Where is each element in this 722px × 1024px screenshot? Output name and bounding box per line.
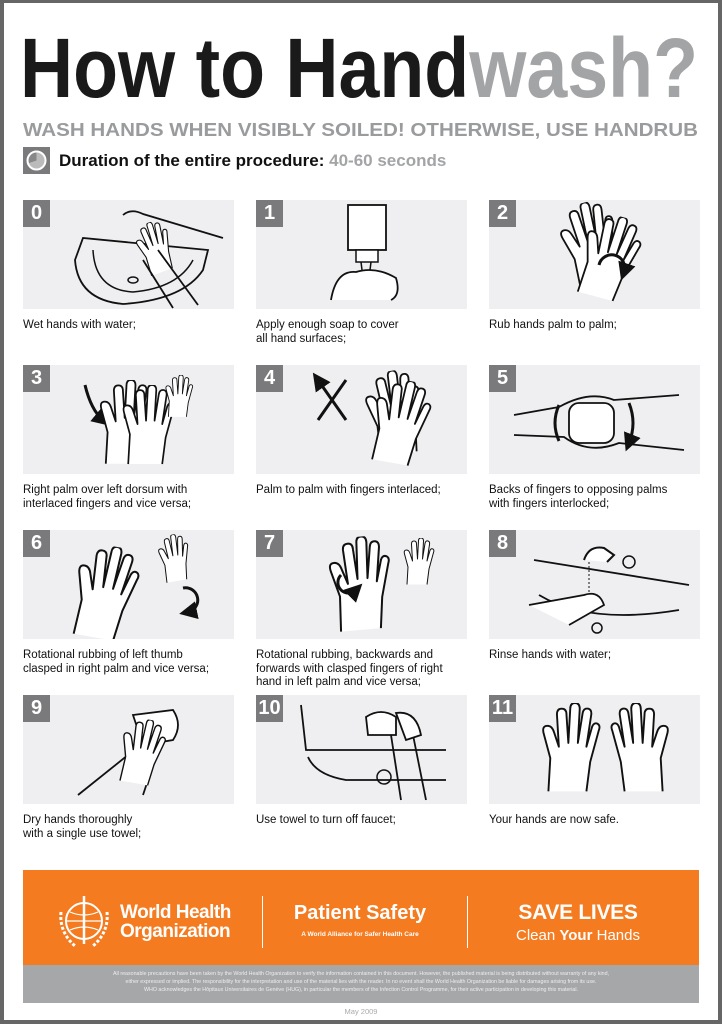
panel: step 5 bbox=[489, 365, 700, 474]
panel: step 9: 9 bbox=[31, 697, 42, 719]
panel: step 3: 3 bbox=[31, 367, 42, 389]
caption 5: Backs of fingers to opposing palms bbox=[489, 484, 667, 496]
footer: disclaimer bbox=[23, 965, 699, 1003]
panel: step 11: 11 bbox=[492, 697, 513, 719]
footer: disclaimer: either expressed or implied. The responsibility for the interpretation and use of the material lies with the reader. In no event shall the World Health Organization be liable for damages arising from its use. bbox=[126, 979, 596, 985]
caption 8: Rinse hands with water; bbox=[489, 649, 611, 661]
caption 7: forwards with clasped fingers of right bbox=[256, 662, 443, 674]
panel: step 1: 1 bbox=[264, 202, 275, 224]
panel: step 6: 6 bbox=[31, 532, 42, 554]
duration line bbox=[23, 147, 446, 174]
caption 3: interlaced fingers and vice versa; bbox=[23, 498, 191, 510]
caption 3: Right palm over left dorsum with bbox=[23, 484, 187, 496]
footer: disclaimer: All reasonable precautions have been taken by the World Health Organization to verify the information contained in this document. However, the published material is being distributed without warranty of any kind, bbox=[113, 971, 609, 977]
caption 0: Wet hands with water; bbox=[23, 319, 136, 331]
panel: step 9 bbox=[23, 695, 234, 804]
Save lives slogan bbox=[516, 901, 640, 944]
footer: disclaimer: WHO acknowledges the Hôpitaux Universitaires de Genève (HUG), in particular the members of the Infection Control Programme, for their active participation in developing this material. bbox=[144, 987, 578, 993]
panel: step 10: 10 bbox=[258, 697, 281, 719]
panel: step 7: 7 bbox=[264, 532, 275, 554]
Save lives slogan: SAVE LIVES bbox=[518, 901, 638, 924]
panel: step 2 bbox=[489, 200, 700, 309]
caption 6: Rotational rubbing of left thumb bbox=[23, 649, 183, 661]
Patient Safety bbox=[294, 902, 426, 938]
panel: step 0: 0 bbox=[31, 202, 42, 224]
caption 9 bbox=[23, 814, 141, 840]
caption 6: clasped in right palm and vice versa; bbox=[23, 662, 209, 674]
panel: step 8: 8 bbox=[497, 532, 508, 554]
caption 9: with a single use towel; bbox=[23, 828, 141, 840]
caption 3 bbox=[23, 484, 191, 510]
icon: clock bbox=[23, 147, 50, 174]
caption 9: Dry hands thoroughly bbox=[23, 814, 132, 826]
caption 10: Use towel to turn off faucet; bbox=[256, 814, 396, 826]
caption 5 bbox=[489, 484, 667, 510]
caption 4: Palm to palm with fingers interlaced; bbox=[256, 484, 441, 496]
icon: WHO emblem bbox=[59, 896, 109, 947]
caption 1: Apply enough soap to cover bbox=[256, 319, 399, 331]
caption 6 bbox=[23, 649, 209, 674]
panel: step 4: 4 bbox=[264, 367, 275, 389]
date: May 2009 bbox=[345, 1007, 377, 1016]
caption 5: with fingers interlocked; bbox=[489, 498, 609, 510]
panel: step 6 bbox=[23, 530, 234, 639]
panel: step 7 bbox=[256, 530, 467, 639]
caption 1: all hand surfaces; bbox=[256, 332, 346, 344]
panel: step 1 bbox=[256, 200, 467, 309]
panel: step 0 bbox=[23, 200, 234, 309]
panel: step 3 bbox=[23, 365, 234, 474]
caption 2: Rub hands palm to palm; bbox=[489, 319, 617, 331]
WHO name bbox=[120, 902, 231, 942]
Patient Safety: Patient Safety bbox=[294, 902, 426, 924]
caption 7: hand in left palm and vice versa; bbox=[256, 676, 421, 688]
panel: step 2: 2 bbox=[497, 202, 508, 224]
panel: step 5: 5 bbox=[497, 367, 508, 389]
Save lives slogan: Clean Your Hands bbox=[516, 927, 640, 944]
WHO name: World Health bbox=[120, 902, 231, 923]
caption 7 bbox=[256, 649, 443, 688]
caption 11: Your hands are now safe. bbox=[489, 814, 619, 826]
Patient Safety: A World Alliance for Safer Health Care bbox=[301, 931, 419, 938]
duration text: Duration of the entire procedure: 40-60 seconds bbox=[59, 151, 446, 170]
panel: step 11 bbox=[489, 695, 700, 804]
caption 7: Rotational rubbing, backwards and bbox=[256, 649, 433, 661]
footer: orange band bbox=[23, 870, 699, 965]
caption 1 bbox=[256, 319, 399, 344]
panel: step 8 bbox=[489, 530, 700, 639]
subtitle: WASH HANDS WHEN VISIBLY SOILED! OTHERWISE, USE HANDRUB bbox=[23, 120, 698, 140]
panel: step 4 bbox=[256, 365, 467, 474]
WHO name: Organization bbox=[120, 921, 230, 942]
panel: step 10 bbox=[256, 695, 467, 804]
